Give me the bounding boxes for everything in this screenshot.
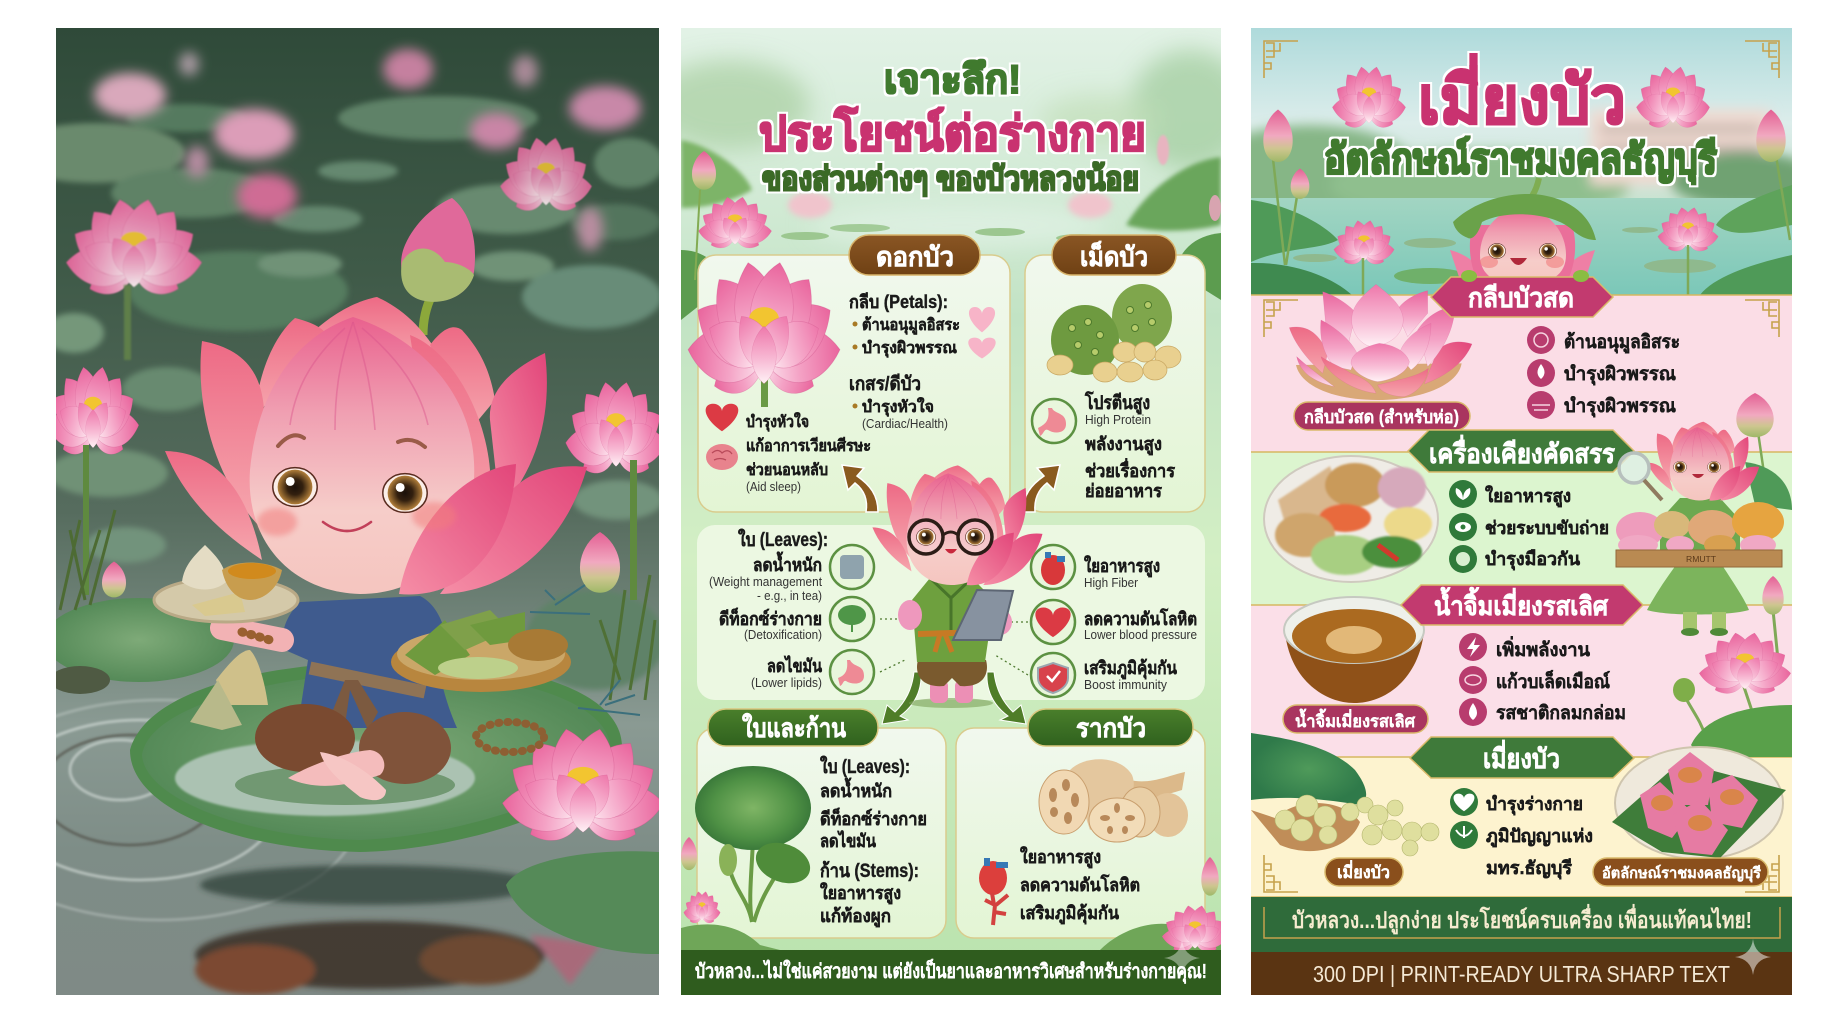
big lily pad (130, 662, 622, 852)
left benefits text: (Detoxification) (744, 627, 822, 642)
mascot with tray and magnifier (1616, 393, 1792, 636)
left benefits text: ใบ (Leaves): (738, 528, 828, 551)
lotus leaf illustration (695, 766, 816, 922)
seed benefits text: ย่อยอาหาร (1085, 481, 1162, 501)
lily pads around mascot (44, 510, 655, 700)
prayer beads (476, 722, 544, 752)
mascot with glasses and tablet (872, 465, 1042, 708)
label: fresh petals: กลีบบัวสด (สำหรับห่อ) (1304, 407, 1459, 427)
root benefits text: เสริมภูมิคุ้มกัน (1020, 903, 1120, 925)
ribbon: dipping sauce: น้ำจิ้มเมี่ยงรสเลิศ (1434, 586, 1608, 621)
right foreground lily pad (506, 851, 659, 954)
panel: miang bua poster (1200, 28, 1820, 995)
ribbon: condiments: เครื่องเคียงคัดสรร (1429, 434, 1615, 469)
petal icons (968, 307, 996, 359)
ribbon: condiments (1408, 430, 1634, 472)
sauce benefits list (1459, 633, 1626, 726)
tea bags on pad (190, 650, 268, 730)
lotus pods and seeds illustration (1047, 284, 1181, 382)
spoon of lotus seeds (1251, 795, 1439, 856)
left benefits text: ดีท็อกซ์ร่างกาย (719, 607, 822, 629)
lake (1251, 198, 1792, 298)
icon: brain (706, 444, 738, 470)
seed benefits text: High Protein (1085, 413, 1151, 427)
seed benefits text: ช่วยเรื่องการ (1085, 458, 1175, 481)
right lotus with seed pod (1673, 576, 1792, 757)
title: ของส่วนต่างๆ ของบัวหลวงน้อย (762, 160, 1139, 197)
right benefits text: Boost immunity (1084, 677, 1167, 692)
icon: red artery (985, 893, 1008, 925)
miang bua benefits list: มทร.ธัญบุรี (1486, 858, 1572, 880)
petals benefits text: กลีบ (Petals): (849, 292, 948, 312)
mascot body (222, 596, 457, 800)
flower side benefits text: แก้อาการเวียนศีรษะ (746, 436, 871, 455)
mascot with leaf hat (1450, 178, 1596, 285)
sauce benefits list: รสชาติกลมกล่อม (1496, 703, 1626, 724)
left benefits text: - e.g., in tea) (757, 588, 822, 603)
dipping sauce bowl (1284, 597, 1424, 703)
label: dipping sauce: น้ำจิ้มเมี่ยงรสเลิศ (1295, 708, 1416, 731)
icon: anatomical heart (979, 858, 1008, 895)
gold corner ornaments (1264, 41, 1779, 892)
lake lily pads and side leaves (1251, 110, 1792, 295)
left benefits text: (Lower lipids) (751, 675, 822, 690)
left benefits text: ลดไขมัน (767, 655, 823, 676)
left icon circles (830, 545, 874, 694)
right benefits text (1084, 555, 1197, 692)
slogan bar: บัวหลวง...ปลูกง่าย ประโยชน์ครบเครื่อง เพื่อนแท้คนไทย! (1292, 903, 1752, 935)
heading pill: seeds: เม็ดบัว (1080, 239, 1148, 272)
plated miang bua (1612, 747, 1786, 859)
side lotus leaves (681, 135, 1221, 320)
panel: flower (686, 255, 1010, 512)
panel: leaves and stems (695, 728, 946, 938)
print specs bar: 300 DPI | PRINT-READY ULTRA SHARP TEXT (1313, 961, 1730, 987)
left lotus leaf (1251, 733, 1366, 805)
section band: fresh petals (1251, 295, 1792, 452)
title: เมี่ยงบัว (1418, 53, 1626, 137)
heading pill: leaves and stems: ใบและก้าน (742, 713, 846, 743)
mascot lotus head (165, 297, 587, 594)
bottom leaf decorations (681, 837, 1229, 955)
ribbon: dipping sauce (1401, 585, 1643, 625)
reflection in water (195, 865, 600, 995)
right icon circles (1031, 545, 1075, 697)
leaves and stems text: ลดน้ำหนัก (820, 777, 892, 801)
panel: central benefits band (697, 525, 1205, 700)
lotus root illustration (1039, 759, 1188, 842)
root benefits text (1020, 846, 1140, 925)
petals benefits list: ต้านอนุมูลอิสระ (1564, 331, 1680, 354)
flower side benefits text: ช่วยนอนหลับ (746, 461, 828, 479)
label: fresh petals (1294, 402, 1470, 430)
ribbon: miang bua (1410, 737, 1634, 778)
leaves and stems text (820, 755, 927, 928)
section band: selected condiments (1251, 452, 1792, 605)
petals benefits text: ต้านอนุมูลอิสระ (862, 316, 960, 336)
condiments benefits list: ช่วยระบบขับถ่าย (1485, 518, 1609, 538)
hills and campus building (1200, 110, 1820, 225)
condiments benefits list (1449, 480, 1609, 573)
right benefits text: ลดความดันโลหิต (1084, 608, 1197, 629)
leaves and stems text: ลดไขมัน (820, 830, 877, 851)
title lotus flowers (1331, 64, 1711, 132)
condiments benefits list: ใยอาหารสูง (1485, 485, 1571, 508)
seed benefits text: พลังงานสูง (1085, 434, 1162, 456)
leaves and stems text: แก้ท้องผูก (820, 906, 891, 928)
background lotus flowers (46, 135, 668, 600)
petals benefits list: บำรุงผิวพรรณ (1564, 396, 1676, 418)
label: dipping sauce (1283, 705, 1428, 733)
label: identity: อัตลักษณ์ราชมงคลธัญบุรี (1602, 864, 1762, 883)
water ripples (56, 698, 348, 922)
right benefits text: ใยอาหารสูง (1084, 555, 1160, 578)
mascot with tray and magnifier: RMUTT (1686, 555, 1716, 564)
snack basket (391, 610, 571, 692)
foreground lotus (502, 728, 659, 841)
sauce benefits list: เพิ่มพลังงาน (1496, 636, 1590, 661)
ribbon: fresh petals: กลีบบัวสด (1468, 283, 1574, 313)
title (1324, 53, 1717, 185)
right benefits text: High Fiber (1084, 575, 1139, 590)
title: อัตลักษณ์ราชมงคลธัญบุรี (1324, 136, 1717, 185)
print specs bar (1251, 952, 1792, 995)
tea tray (154, 545, 298, 622)
arrow: to leaves (882, 672, 921, 724)
title: ประโยชน์ต่อร่างกาย (759, 105, 1146, 161)
background lily pads (5, 96, 665, 690)
stamen benefits text: บำรุงหัวใจ (862, 397, 934, 417)
lotus flower illustration (686, 257, 842, 407)
mascot face (257, 435, 456, 536)
petals benefits text (849, 292, 960, 358)
flower side benefits text (746, 412, 871, 494)
stamen benefits text: เกสร/ดีบัว (849, 373, 921, 395)
blurred pond background (650, 50, 1250, 247)
slogan bar (1251, 897, 1792, 952)
heading pill: flower (849, 235, 980, 275)
stamen benefits text: (Cardiac/Health) (862, 417, 948, 431)
panel: health benefits infographic (650, 28, 1250, 995)
root benefits text: ใยอาหารสูง (1020, 846, 1101, 869)
lotus bud on head (401, 198, 475, 335)
arrow: to flower (842, 465, 878, 512)
condiments benefits list: บำรุงมือวกัน (1485, 549, 1581, 571)
panel: root (956, 728, 1205, 938)
icon: heart (706, 404, 738, 431)
ribbon: fresh petals (1431, 270, 1613, 317)
label: identity (1593, 858, 1768, 886)
petals benefits list (1527, 326, 1680, 419)
section band: miang bua (1251, 757, 1792, 897)
left benefits text: ลดน้ำหนัก (753, 551, 822, 575)
petals benefits list: บำรุงผิวพรรณ (1564, 364, 1676, 386)
panel: seeds (1025, 255, 1205, 512)
sparkle watermark (1164, 940, 1200, 976)
heading pill: seeds (1052, 235, 1176, 275)
arrow: to seeds (1023, 465, 1060, 512)
stamen benefits text (849, 373, 948, 431)
flower side benefits text: บำรุงหัวใจ (746, 412, 809, 432)
slogan bar (681, 950, 1221, 995)
left benefits text: (Weight management (709, 574, 822, 589)
sauce benefits list: แก้วบเล็ดเมือณ์ (1496, 669, 1610, 693)
root benefits text: ลดความดันโลหิต (1020, 874, 1140, 895)
miang bua benefits list: บำรุงร่างกาย (1486, 794, 1583, 816)
seed benefits text: โปรตีนสูง (1084, 391, 1150, 415)
dragonflies (530, 585, 640, 715)
seed benefits text (1084, 391, 1175, 501)
ribbon: miang bua: เมี่ยงบัว (1483, 739, 1560, 774)
panel: lotus mascot photo scene (0, 28, 668, 995)
blurred distant flowers (94, 49, 641, 251)
miang bua benefits list: ภูมิปัญญาแห่ง (1486, 826, 1593, 848)
title: เจาะลึก! (884, 58, 1021, 102)
section band: dipping sauce (1251, 605, 1792, 757)
petals benefits text: บำรุงผิวพรรณ (862, 339, 957, 358)
left benefits text (709, 528, 828, 690)
fresh petals lotus in bowl (1289, 284, 1472, 400)
icon: stomach (1032, 399, 1076, 443)
right benefits text: Lower blood pressure (1084, 627, 1197, 642)
leaves and stems text: ก้าน (Stems): (820, 860, 919, 882)
leaves and stems text: ใบ (Leaves): (820, 755, 910, 778)
heading pill: leaves and stems (708, 709, 878, 746)
title (759, 58, 1146, 197)
heading pill: flower: ดอกบัว (876, 242, 954, 272)
heading pill: root (1028, 709, 1193, 746)
miang bua benefits list (1450, 788, 1593, 880)
sparkle watermark (1735, 939, 1771, 975)
leaves and stems text: ดีท็อกซ์ร่างกาย (820, 807, 927, 829)
slogan bar: บัวหลวง...ไม่ใช่แค่สวยงาม แต่ยังเป็นยาและอาหารวิเศษสำหรับร่างกายคุณ! (695, 958, 1207, 984)
flower side benefits text: (Aid sleep) (746, 480, 801, 494)
condiments plate (1264, 456, 1438, 582)
label: seeds (1325, 858, 1403, 886)
heading pill: root: รากบัว (1076, 713, 1146, 743)
right benefits text: เสริมภูมิคุ้มกัน (1084, 658, 1178, 680)
leaves and stems text: ใยอาหารสูง (820, 882, 901, 905)
arrow: to root (987, 672, 1026, 724)
label: seeds: เมี่ยงบัว (1337, 860, 1390, 882)
